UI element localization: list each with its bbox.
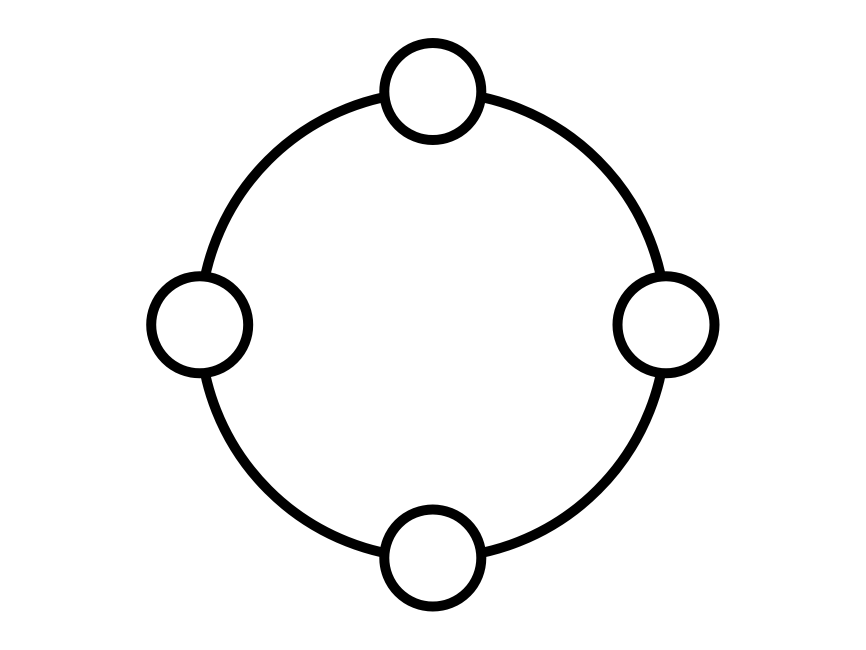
node: top	[384, 43, 481, 140]
node: left	[151, 276, 248, 373]
node: right	[618, 276, 714, 373]
node: bottom	[384, 510, 481, 606]
ring	[200, 92, 666, 558]
